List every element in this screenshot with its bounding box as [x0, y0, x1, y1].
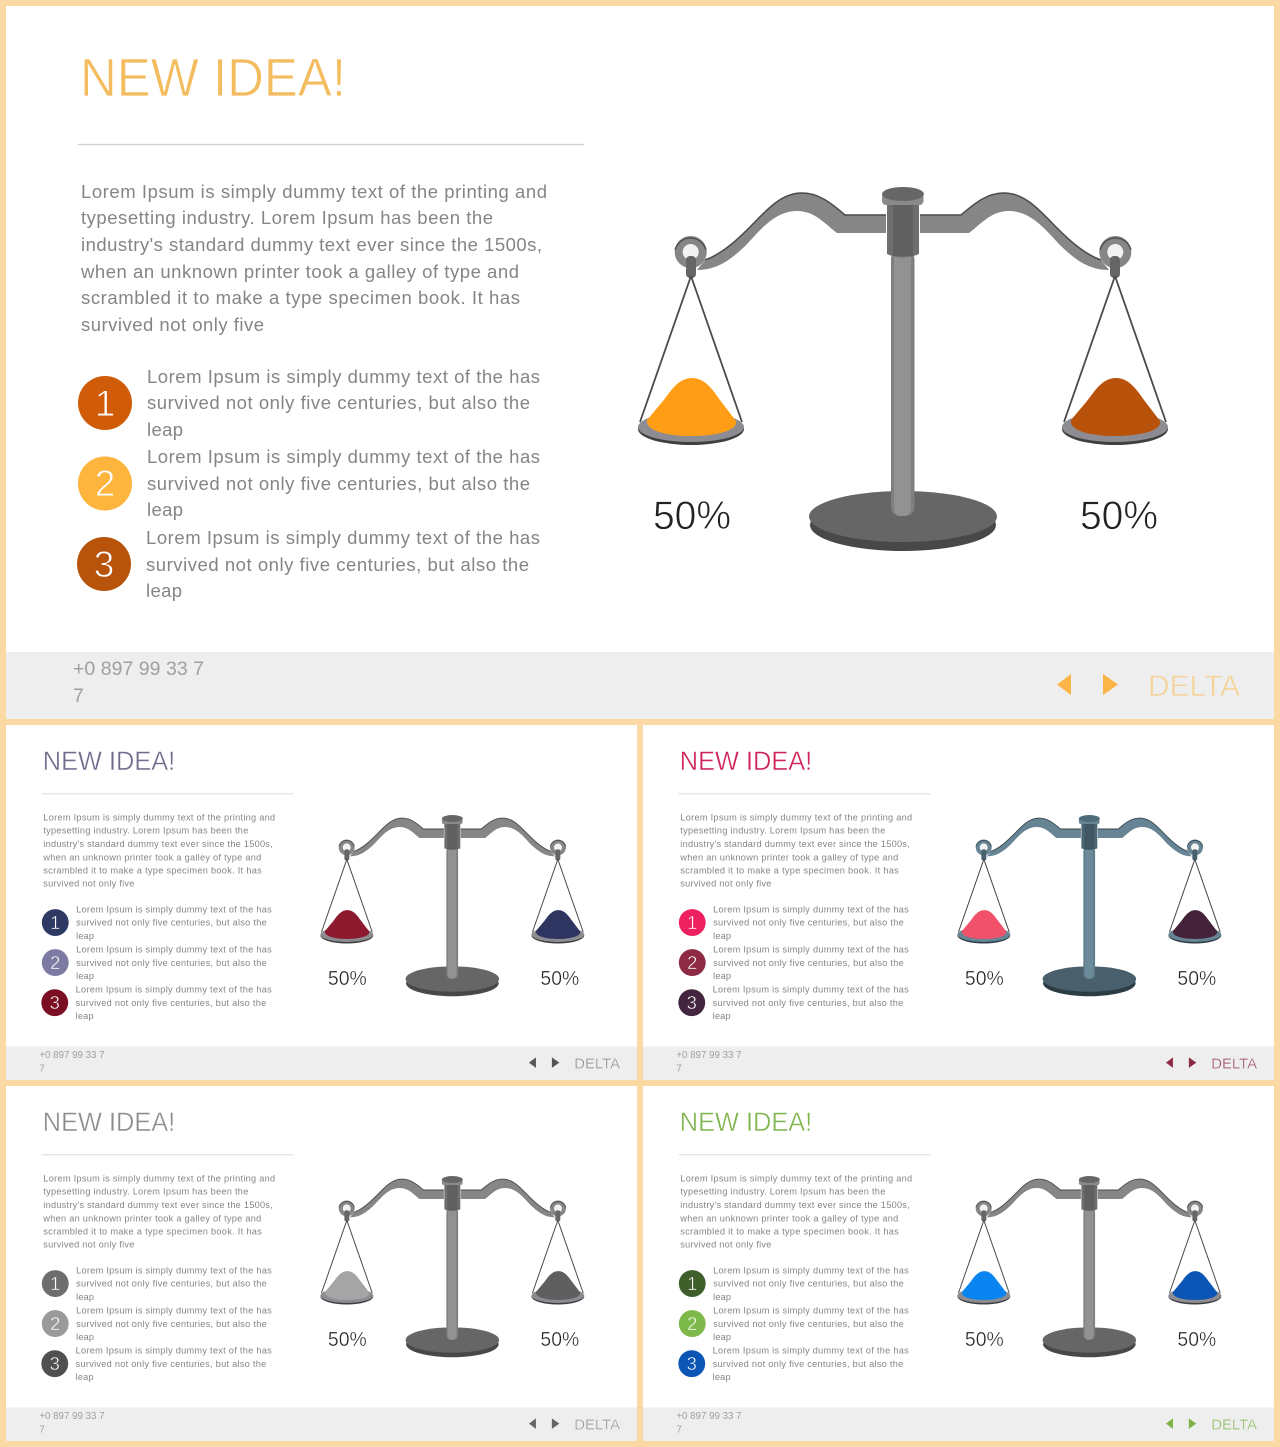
phone number: +0 897 99 33 7 — [39, 1050, 105, 1061]
list item 1: survived not only five centuries, but also the — [713, 1279, 904, 1289]
list item 2 — [42, 944, 272, 981]
list item 3: Lorem Ipsum is simply dummy text of the has — [76, 1346, 272, 1356]
list item 3: survived not only five centuries, but also the — [76, 1359, 266, 1369]
list item 2: leap — [713, 971, 731, 981]
panel: gray slide — [6, 1086, 637, 1441]
panel: crimson and teal slide — [643, 725, 1274, 1080]
footer bar — [6, 652, 1274, 719]
list item 2 — [679, 944, 909, 981]
list item 2: 2 — [50, 1313, 60, 1334]
list item 1: leap — [76, 1292, 94, 1302]
list item 2: 2 — [50, 952, 60, 973]
list item 3: leap — [76, 1011, 94, 1021]
list item 2: leap — [76, 1332, 94, 1342]
footer bar — [6, 1407, 637, 1441]
list item 3: survived not only five centuries, but also the — [146, 554, 529, 575]
footer bar — [6, 1046, 637, 1080]
list item 1 — [679, 905, 909, 941]
body text — [42, 1174, 275, 1250]
list item 1: Lorem Ipsum is simply dummy text of the has — [76, 905, 272, 915]
phone number: +0 897 99 33 7 — [676, 1411, 742, 1422]
list item 3: 3 — [687, 992, 697, 1013]
body text: survived not only five — [680, 1240, 771, 1250]
body text: when an unknown printer took a galley of type and — [42, 852, 261, 862]
list item 2: Lorem Ipsum is simply dummy text of the has — [76, 1305, 272, 1315]
body text: survived not only five — [43, 1240, 134, 1250]
list item 1 — [679, 1266, 909, 1302]
panel: main orange slide — [6, 6, 1274, 719]
list item 3 — [41, 1346, 272, 1382]
body text: typesetting industry. Lorem Ipsum has been the — [680, 825, 885, 835]
list item 2: 2 — [687, 952, 697, 973]
list item 3: 3 — [687, 1353, 697, 1374]
body text: industry's standard dummy text ever since the 1500s, — [680, 839, 910, 849]
body text: industry's standard dummy text ever since the 1500s, — [680, 1200, 910, 1210]
body text: industry's standard dummy text ever since the 1500s, — [43, 839, 273, 849]
balance scale — [320, 1176, 584, 1357]
list item 1: survived not only five centuries, but also the — [76, 1279, 267, 1289]
list item 2: 2 — [95, 463, 115, 504]
title: NEW IDEA! — [43, 1107, 175, 1137]
body text: when an unknown printer took a galley of type and — [679, 1213, 898, 1223]
right percentage: 50% — [1080, 494, 1158, 538]
list item 1: survived not only five centuries, but also the — [147, 392, 530, 413]
list item 3: leap — [713, 1011, 731, 1021]
phone number: +0 897 99 33 7 — [73, 658, 204, 680]
list item 3: 3 — [50, 1353, 60, 1374]
list item 3 — [77, 527, 540, 601]
list item 3 — [41, 985, 272, 1021]
brand label: DELTA — [1148, 670, 1240, 703]
body text: when an unknown printer took a galley of type and — [80, 261, 519, 282]
body text: typesetting industry. Lorem Ipsum has been the — [680, 1186, 885, 1196]
left percentage: 50% — [328, 1329, 367, 1351]
navigation arrows — [529, 1057, 559, 1068]
brand label: DELTA — [574, 1055, 620, 1072]
list item 2: Lorem Ipsum is simply dummy text of the has — [76, 944, 272, 954]
list item 2: leap — [76, 971, 94, 981]
list item 1: leap — [76, 931, 94, 941]
body text: Lorem Ipsum is simply dummy text of the printing and — [81, 181, 547, 202]
right percentage: 50% — [1177, 968, 1216, 990]
phone number: +0 897 99 33 7 — [39, 1411, 105, 1422]
body text: scrambled it to make a type specimen book. It has — [680, 865, 899, 875]
phone number — [676, 1411, 742, 1435]
list item 3: leap — [713, 1372, 731, 1382]
phone number: +0 897 99 33 7 — [676, 1050, 742, 1061]
list item 2 — [78, 446, 540, 520]
list item 1: 1 — [95, 383, 115, 424]
body text: typesetting industry. Lorem Ipsum has been the — [43, 825, 248, 835]
list item 3: Lorem Ipsum is simply dummy text of the has — [713, 1346, 909, 1356]
list item 2: Lorem Ipsum is simply dummy text of the has — [147, 446, 540, 467]
title: NEW IDEA! — [680, 1107, 812, 1137]
list item 3: 3 — [50, 992, 60, 1013]
list item 2 — [679, 1305, 909, 1342]
brand label: DELTA — [1211, 1055, 1257, 1072]
body text: survived not only five — [680, 879, 771, 889]
title: NEW IDEA! — [680, 746, 812, 776]
body text — [80, 181, 547, 335]
phone number — [39, 1411, 105, 1435]
phone number — [676, 1050, 742, 1074]
body text: typesetting industry. Lorem Ipsum has been the — [81, 207, 493, 228]
body text: scrambled it to make a type specimen book. It has — [43, 1226, 262, 1236]
balance scale — [957, 815, 1221, 996]
balance scale — [957, 1176, 1221, 1357]
left percentage: 50% — [965, 1329, 1004, 1351]
footer bar — [643, 1046, 1274, 1080]
list item 2: leap — [713, 1332, 731, 1342]
left percentage: 50% — [965, 968, 1004, 990]
list item 2: Lorem Ipsum is simply dummy text of the has — [713, 1305, 909, 1315]
right percentage: 50% — [540, 968, 579, 990]
list item 3: survived not only five centuries, but also the — [713, 998, 903, 1008]
body text: industry's standard dummy text ever since the 1500s, — [43, 1200, 273, 1210]
balance scale — [320, 815, 584, 996]
phone number: 7 — [39, 1063, 45, 1074]
list item 2: Lorem Ipsum is simply dummy text of the has — [713, 944, 909, 954]
list item 3: leap — [146, 580, 182, 601]
phone number: 7 — [73, 685, 84, 707]
list item 2: leap — [147, 499, 183, 520]
list item 1: leap — [713, 1292, 731, 1302]
phone number — [73, 658, 204, 707]
list item 1: survived not only five centuries, but also the — [76, 918, 267, 928]
navigation arrows — [1057, 674, 1118, 695]
list item 1: 1 — [50, 1273, 60, 1294]
list item 3: survived not only five centuries, but also the — [76, 998, 266, 1008]
list item 1 — [78, 366, 540, 440]
body text: scrambled it to make a type specimen book. It has — [43, 865, 262, 875]
body text: industry's standard dummy text ever since the 1500s, — [81, 234, 542, 255]
list item 1 — [42, 1266, 272, 1302]
navigation arrows — [1166, 1057, 1196, 1068]
list item 2: survived not only five centuries, but also the — [147, 473, 530, 494]
left percentage: 50% — [653, 494, 731, 538]
list item 3: Lorem Ipsum is simply dummy text of the has — [146, 527, 540, 548]
list item 2: 2 — [687, 1313, 697, 1334]
title: NEW IDEA! — [80, 48, 346, 108]
phone number — [39, 1050, 105, 1074]
list item 3: survived not only five centuries, but also the — [713, 1359, 903, 1369]
list item 2 — [42, 1305, 272, 1342]
phone number: 7 — [676, 1424, 682, 1435]
balance scale — [638, 187, 1168, 551]
list item 3: 3 — [94, 544, 114, 585]
body text: Lorem Ipsum is simply dummy text of the printing and — [680, 1174, 912, 1184]
list item 1: Lorem Ipsum is simply dummy text of the has — [147, 366, 540, 387]
list item 1: 1 — [687, 912, 697, 933]
body text: Lorem Ipsum is simply dummy text of the printing and — [680, 813, 912, 823]
list item 1: leap — [713, 931, 731, 941]
list item 1: Lorem Ipsum is simply dummy text of the has — [713, 1266, 909, 1276]
brand label: DELTA — [1211, 1416, 1257, 1433]
list item 2: survived not only five centuries, but also the — [713, 958, 904, 968]
panel: purple slide — [6, 725, 637, 1080]
right percentage: 50% — [1177, 1329, 1216, 1351]
phone number: 7 — [676, 1063, 682, 1074]
list item 2: survived not only five centuries, but also the — [76, 958, 267, 968]
title: NEW IDEA! — [43, 746, 175, 776]
body text: scrambled it to make a type specimen book. It has — [680, 1226, 899, 1236]
list item 3 — [678, 985, 909, 1021]
list item 1: leap — [147, 419, 183, 440]
list item 1 — [42, 905, 272, 941]
body text: typesetting industry. Lorem Ipsum has been the — [43, 1186, 248, 1196]
body text — [679, 813, 912, 889]
body text: survived not only five — [43, 879, 134, 889]
brand label: DELTA — [574, 1416, 620, 1433]
list item 1: 1 — [50, 912, 60, 933]
list item 3: Lorem Ipsum is simply dummy text of the has — [713, 985, 909, 995]
footer bar — [643, 1407, 1274, 1441]
phone number: 7 — [39, 1424, 45, 1435]
navigation arrows — [529, 1418, 559, 1429]
body text: Lorem Ipsum is simply dummy text of the printing and — [43, 1174, 275, 1184]
body text — [42, 813, 275, 889]
body text: scrambled it to make a type specimen book. It has — [81, 287, 520, 308]
list item 3: leap — [76, 1372, 94, 1382]
right percentage: 50% — [540, 1329, 579, 1351]
body text — [679, 1174, 912, 1250]
panel: green and blue slide — [643, 1086, 1274, 1441]
body text: when an unknown printer took a galley of type and — [679, 852, 898, 862]
left percentage: 50% — [328, 968, 367, 990]
body text: Lorem Ipsum is simply dummy text of the printing and — [43, 813, 275, 823]
body text: when an unknown printer took a galley of type and — [42, 1213, 261, 1223]
list item 1: 1 — [687, 1273, 697, 1294]
list item 1: Lorem Ipsum is simply dummy text of the has — [713, 905, 909, 915]
body text: survived not only five — [81, 314, 264, 335]
list item 3 — [678, 1346, 909, 1382]
list item 2: survived not only five centuries, but also the — [76, 1319, 267, 1329]
list item 1: survived not only five centuries, but also the — [713, 918, 904, 928]
list item 3: Lorem Ipsum is simply dummy text of the has — [76, 985, 272, 995]
list item 2: survived not only five centuries, but also the — [713, 1319, 904, 1329]
list item 1: Lorem Ipsum is simply dummy text of the has — [76, 1266, 272, 1276]
navigation arrows — [1166, 1418, 1196, 1429]
